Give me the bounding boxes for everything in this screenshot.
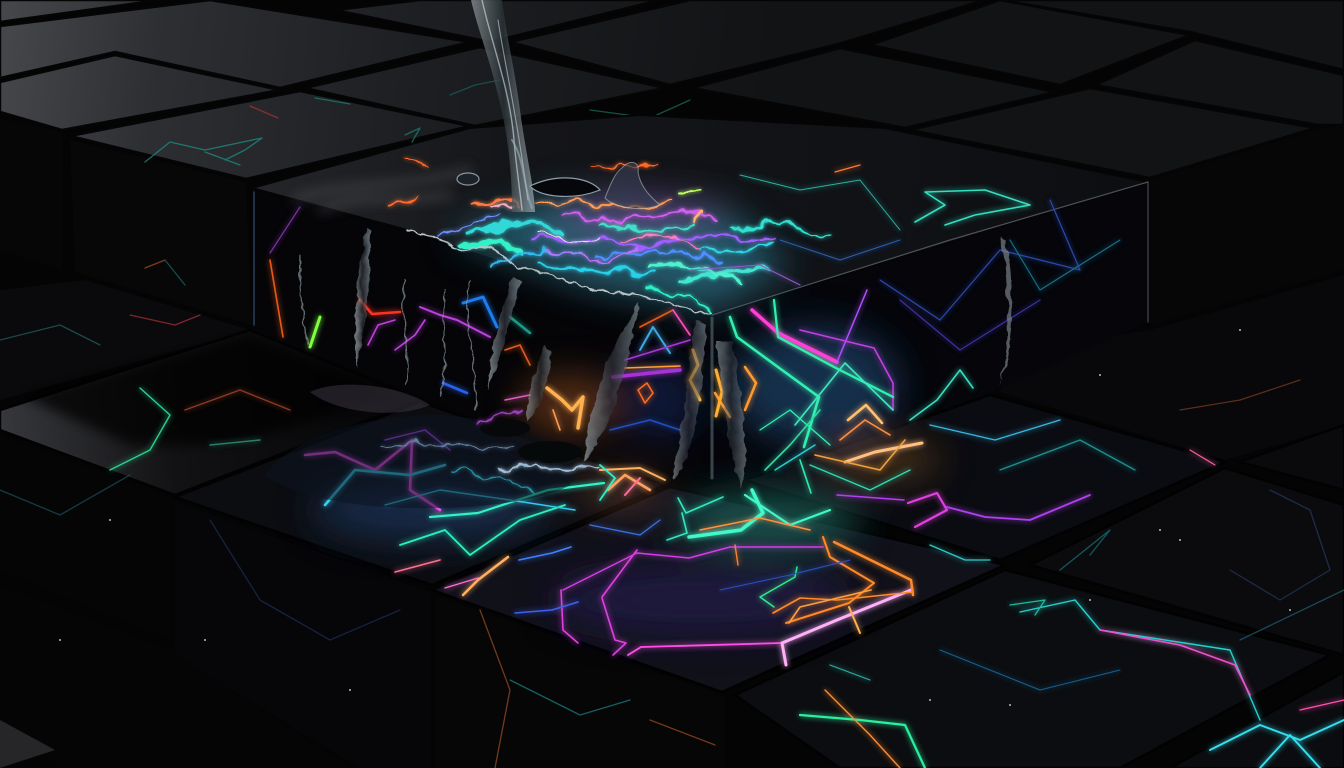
tile: bottom right neon [735,570,1330,768]
panel: wet tile dark reflection [20,335,400,445]
tile: right neon [745,395,1225,560]
right face [712,182,1148,482]
block edges [1147,182,1149,322]
glow: broad colour wash [310,195,940,635]
circuits: water pool top (distorted) [390,158,830,312]
circuits: front left tile [305,430,665,572]
circuits: clean lines on block top [690,165,1030,285]
back tile grid [0,0,1344,179]
tile: far right [1030,468,1344,655]
left back block sides [0,118,1344,460]
top face [252,115,1148,315]
left face [252,190,712,480]
wavy top streaks [295,170,470,210]
circuits: left wet tile [110,388,290,470]
tile: front centre neon [432,487,1005,692]
circuits: left face of block [270,207,700,430]
lower tile tops and sides [0,330,1344,768]
water: falling sheets over the block front [300,228,1012,488]
water: splash on block top [407,162,712,315]
water: spread pool at block base [265,385,600,508]
tile: left wet reflective [0,330,420,495]
tile: front left neon [175,402,665,585]
circuits: right neon tile [775,420,1215,527]
circuits: front centre tile [445,490,990,665]
stars: dust specks [59,329,1291,706]
circuits: bottom right tile [800,600,1344,768]
panel: central glass block [252,115,1148,482]
front faces of lower tiles [0,435,725,768]
circuits: right face of block [715,200,1120,470]
icon: pouring water stream [471,0,535,212]
